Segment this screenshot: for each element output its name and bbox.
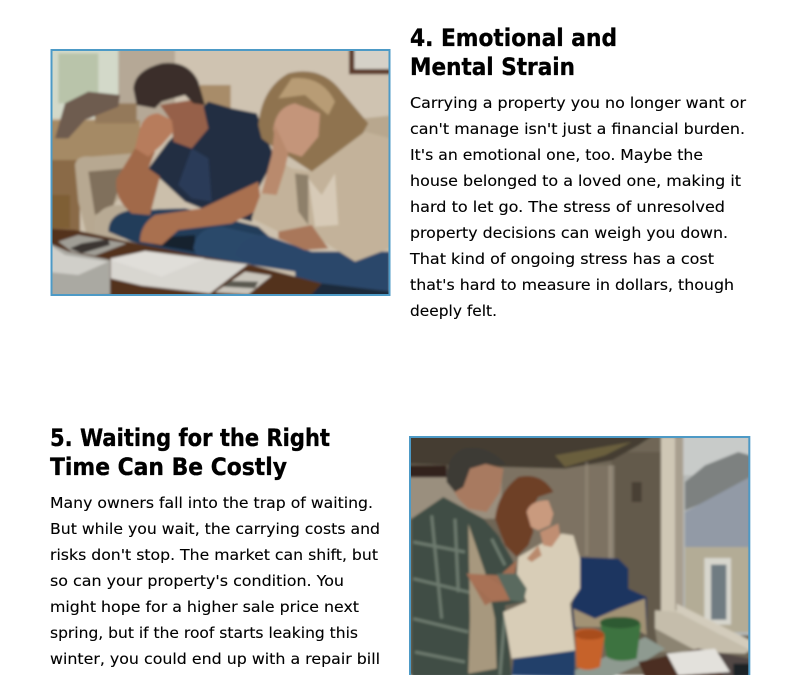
text block: section 4 body: that's hard to measure in dollars, though (410, 276, 734, 294)
papers (111, 251, 248, 293)
table and papers (638, 648, 726, 675)
text block: section 4 body: Carrying a property you no longer want or (410, 94, 747, 112)
woman (512, 650, 575, 675)
text block: section 4 body: deeply felt. (410, 302, 497, 320)
woman (250, 236, 388, 294)
table (52, 228, 322, 294)
text block: section 4 body: property decisions can weigh you down. (410, 224, 728, 242)
photo: couple looking out a window in a leaking, water-damaged room (409, 436, 750, 675)
text block: section 4 body: house belonged to a loved one, making it (410, 172, 741, 190)
text block: section 4 body (409, 94, 747, 320)
text block: section 5 body: But while you wait, the carrying costs and (50, 520, 380, 538)
text block: section 5 body: so can your property's condition. You (50, 572, 344, 590)
tissue box (52, 242, 112, 294)
man (107, 206, 269, 256)
text block: section 5 body: might hope for a higher sale price next (50, 598, 359, 616)
floor (575, 637, 665, 675)
blue tarp and bag (572, 557, 647, 635)
man (412, 497, 527, 675)
text block: section 4 body: That kind of ongoing stress has a cost (409, 250, 714, 268)
heading: section 4 (410, 24, 617, 81)
text block: section 4 body: can't manage isn't just a financial burden. (410, 120, 745, 138)
text block: section 4 body: It's an emotional one, too. Maybe the (410, 146, 703, 164)
window (659, 438, 678, 614)
text block: section 5 body (50, 494, 380, 668)
text block: section 4 body: hard to let go. The stress of unresolved (410, 198, 725, 216)
drips (608, 464, 616, 560)
heading: section 5: 5. Waiting for the Right (50, 424, 330, 452)
tablet and glasses (58, 235, 127, 256)
buckets (600, 617, 641, 661)
photo: stressed couple reviewing papers at a coffee table (50, 49, 390, 296)
text block: section 5 body: Many owners fall into the trap of waiting. (50, 494, 373, 512)
heading: section 4: Mental Strain (410, 53, 575, 81)
text block: section 5 body: spring, but if the roof starts leaking this (50, 624, 358, 642)
heading: section 4: 4. Emotional and (410, 24, 617, 52)
heading: section 5: Time Can Be Costly (50, 453, 287, 481)
sill (677, 604, 750, 650)
text block: section 5 body: winter, you could end up with a repair bill (50, 650, 380, 668)
text block: section 5 body: risks don't stop. The market can shift, but (50, 546, 378, 564)
heading: section 5 (50, 424, 330, 481)
